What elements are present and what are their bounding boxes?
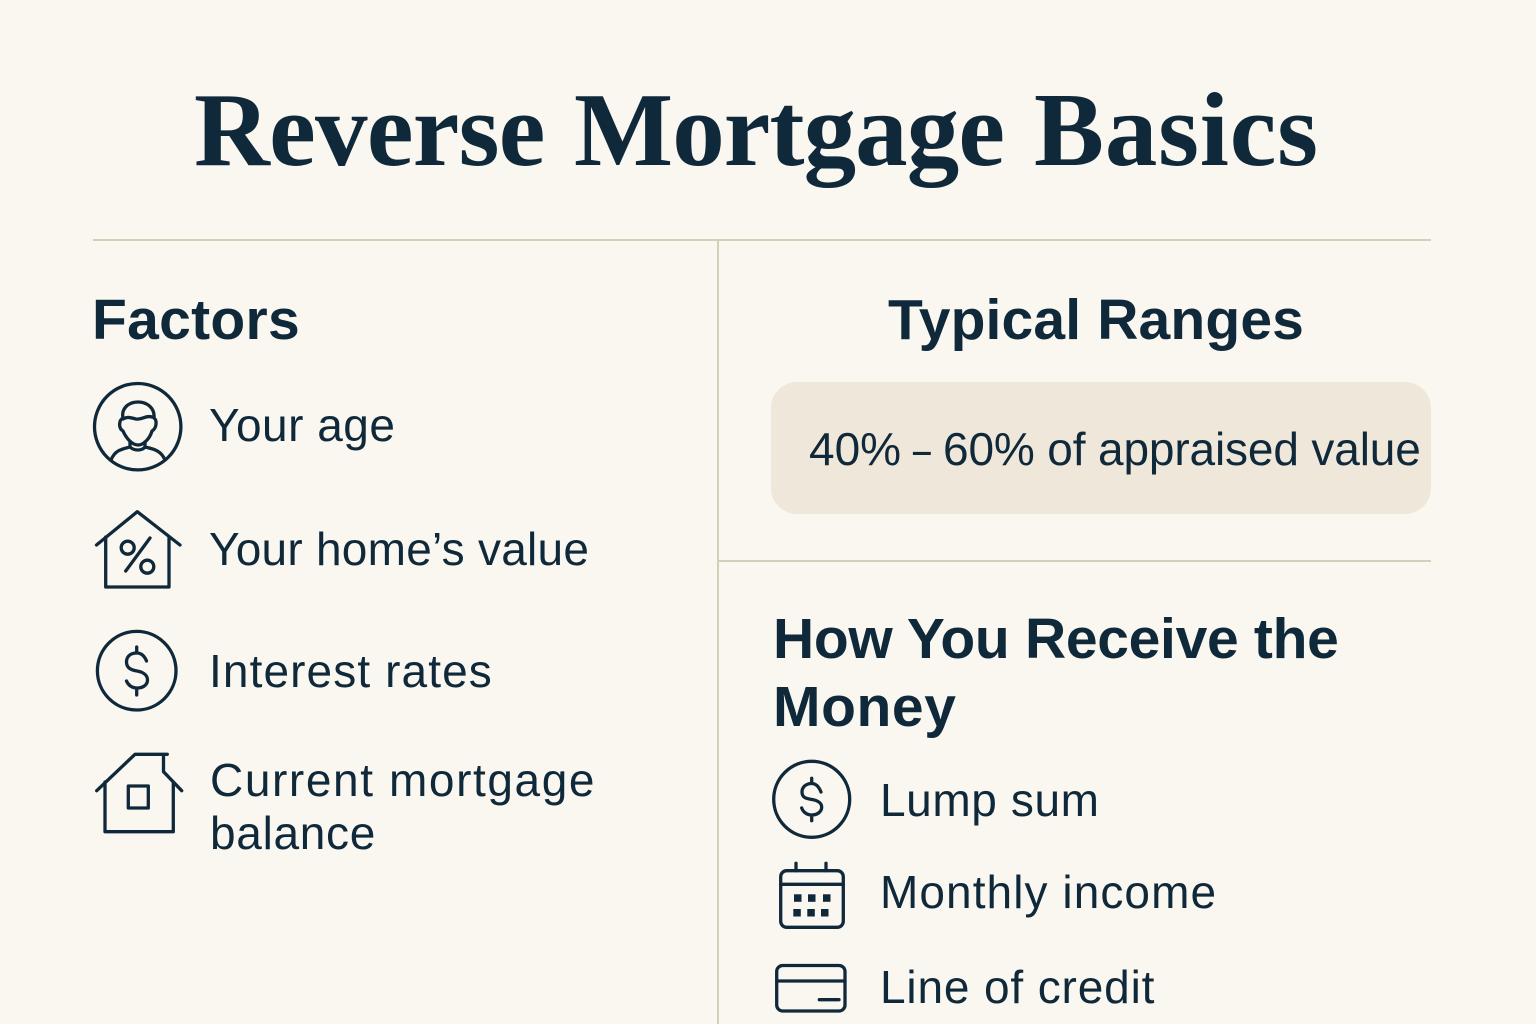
text: current mortgage balance: Current mortgage bbox=[210, 754, 596, 806]
heading: how you receive the money: Money bbox=[773, 675, 957, 739]
callout: range bbox=[771, 382, 1431, 514]
text: lump sum: Lump sum bbox=[880, 774, 1100, 826]
heading: factors: Factors bbox=[92, 288, 300, 352]
callout: range: – bbox=[913, 423, 931, 475]
callout: range: 40% bbox=[809, 423, 901, 475]
heading: how you receive the money: How You Receive the bbox=[773, 607, 1339, 671]
text: monthly income: Monthly income bbox=[880, 866, 1217, 918]
callout: range: 60% of appraised value bbox=[943, 423, 1421, 475]
heading: how you receive the money bbox=[773, 607, 1339, 739]
title: Mortgage bbox=[574, 71, 1004, 188]
panel: typical ranges bbox=[771, 288, 1431, 514]
icon: calendar bbox=[779, 862, 845, 929]
text: line of credit: Line of credit bbox=[880, 961, 1155, 1013]
title: Reverse bbox=[194, 71, 545, 188]
panel: factors bbox=[92, 288, 596, 859]
icon: person in circle bbox=[92, 382, 183, 472]
icon: house bbox=[95, 752, 184, 834]
text: current mortgage balance: balance bbox=[210, 807, 376, 859]
text: interest rates: Interest rates bbox=[209, 645, 493, 697]
title: Basics bbox=[1034, 71, 1319, 188]
text: your home's value: Your home’s value bbox=[209, 523, 589, 575]
icon: credit card bbox=[775, 964, 847, 1013]
heading: typical ranges: Typical Ranges bbox=[888, 288, 1304, 352]
title bbox=[194, 71, 1319, 188]
icon: dollar circle bbox=[96, 630, 178, 712]
icon: house with percent bbox=[94, 510, 182, 589]
text: current mortgage balance bbox=[210, 754, 596, 859]
text: your age: Your age bbox=[209, 399, 395, 451]
icon: dollar circle bbox=[772, 760, 852, 839]
panel: how you receive the money bbox=[772, 607, 1339, 1013]
